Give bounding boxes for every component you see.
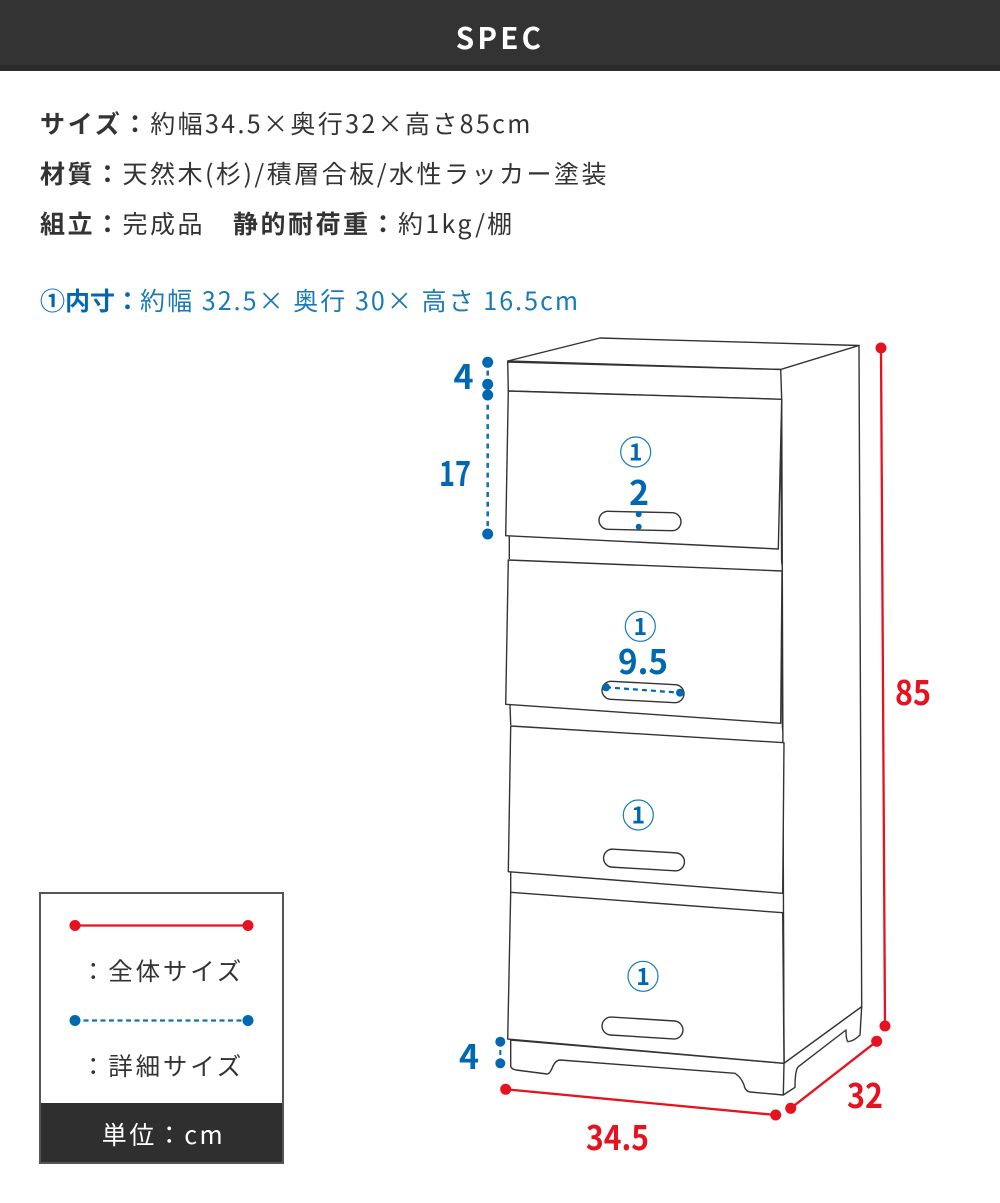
header bar — [0, 0, 1000, 71]
red overall dimensions — [500, 342, 890, 1120]
handles — [599, 511, 681, 531]
blue dimension labels — [439, 350, 668, 1079]
blue dimension labels: 4 — [453, 350, 474, 399]
blue dimension labels: 17 — [439, 447, 471, 496]
top and side — [508, 338, 859, 370]
top band — [508, 362, 782, 399]
legend: overall size label: ：全体サイズ — [81, 953, 244, 988]
legend: unit band — [41, 1103, 282, 1162]
spec: size: サイズ：約幅34.5×奥行32×高さ85cm — [40, 105, 533, 141]
red dimension labels — [586, 666, 931, 1160]
drawer 1 — [506, 391, 782, 549]
red dimension labels: 34.5 — [586, 1111, 649, 1160]
blue detail dimensions — [482, 357, 684, 1068]
circled number digits: 1 — [634, 608, 647, 642]
blue dimension labels: 9.5 — [618, 635, 668, 684]
blue dimension labels: 2 — [629, 466, 649, 515]
legend: unit band: 単位：cm — [102, 1116, 225, 1152]
circled number digits: 1 — [636, 958, 650, 992]
drawer 3 — [508, 726, 784, 893]
circled numbers — [621, 437, 658, 991]
drawer 2 — [506, 560, 782, 723]
legend: line samples — [70, 920, 254, 1026]
circled number digits: 1 — [629, 434, 642, 468]
spec: inner dimensions: ①内寸：約幅 32.5× 奥行 30× 高さ 16.5cm — [40, 282, 580, 318]
drawer 4 — [508, 892, 784, 1063]
gap strips — [509, 536, 782, 572]
chest outline — [506, 338, 862, 1095]
title: SPEC — [456, 16, 544, 58]
legend box — [39, 892, 284, 1164]
spec: assembly and load: 組立：完成品 静的耐荷重：約1kg/棚 — [40, 205, 514, 241]
red dimension labels: 32 — [847, 1069, 883, 1118]
blue dimension labels: 4 — [459, 1030, 479, 1079]
circled number digits — [629, 434, 650, 992]
base — [511, 1007, 862, 1095]
circled number digits: 1 — [632, 796, 645, 830]
red dimension labels: 85 — [895, 666, 931, 715]
legend: detail size label: ：詳細サイズ — [81, 1048, 244, 1083]
spec: material: 材質：天然木(杉)/積層合板/水性ラッカー塗装 — [40, 155, 609, 191]
